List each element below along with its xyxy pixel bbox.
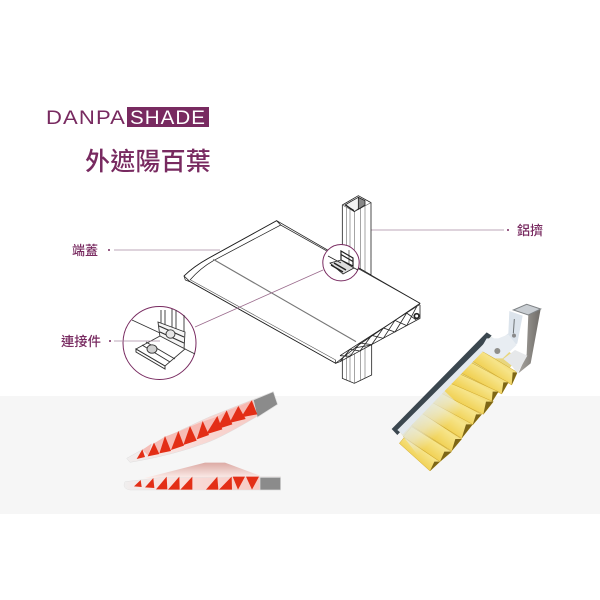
pink cell shading [142,400,257,456]
red slat: curved profile [127,392,278,462]
technical drawing: post and panel [184,196,420,383]
logo: DANPA SHADE [46,107,209,129]
panel end truss [340,307,417,362]
label: aluminum extrusion: 鋁擠 [517,223,543,238]
aluminium bracket post [499,304,541,373]
label: end cap: 端蓋 [72,243,98,258]
post upper [342,196,371,275]
title: 外遮陽百葉 [85,148,211,176]
bracket foot and bolt [480,334,527,373]
yellow ribs [399,350,517,471]
label: connector: 連接件 [61,333,101,349]
grey end tube [260,477,281,490]
label: connector [61,333,160,349]
small detail circle [323,245,359,281]
red slat: flat profile with motion fan [124,463,281,490]
red cells [137,400,257,459]
post lower [342,345,372,383]
connector leader line [195,270,323,327]
grey end tube [253,392,278,417]
background band [0,396,600,514]
rib shadows [430,372,517,471]
logo: DANPA SHADE: DANPA [46,107,126,129]
panel [184,221,420,363]
large detail circle: connector [123,306,196,380]
red cells [134,477,259,490]
blade base [398,337,517,471]
logo: DANPA SHADE: SHADE [130,107,206,129]
dark edge strip [392,332,492,435]
yellow slat photo [392,304,541,471]
pale glare [398,387,470,471]
